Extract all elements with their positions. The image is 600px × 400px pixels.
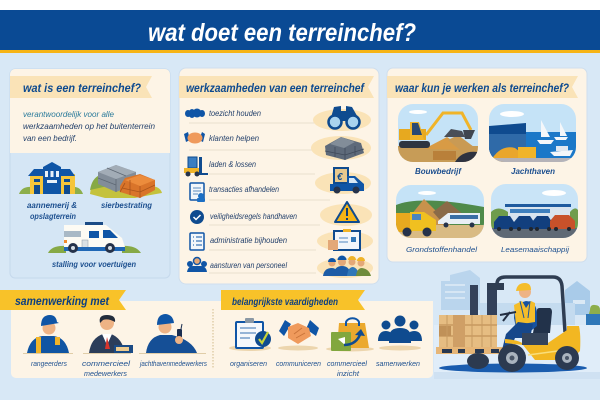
- label: commercieel inzicht: inzicht: [337, 369, 360, 378]
- skill: samenwerken: [378, 316, 422, 350]
- description text: werkzaamheden op het buitenterrein: [23, 122, 156, 131]
- ribbon: belangrijkste vaardigheden: belangrijkste vaardigheden: [232, 296, 338, 308]
- panel: bottom strip: [0, 290, 433, 378]
- task: administratie bijhouden: [190, 233, 288, 250]
- ribbon: belangrijkste vaardigheden: [221, 290, 365, 310]
- seat: [533, 308, 552, 333]
- person: jachthavenmedewerker: [139, 314, 206, 354]
- label: jachthavenmedewerkers: jachthavenmedewerkers: [139, 359, 207, 368]
- background scene: [434, 270, 600, 379]
- ribbon: samenwerking met: samenwerking met: [15, 296, 110, 308]
- label: organiseren: organiseren: [230, 359, 267, 368]
- task: aansturen van personeel: aansturen van personeel: [210, 261, 287, 270]
- task: klanten helpen: klanten helpen: [209, 134, 260, 143]
- heading ribbon: [10, 76, 152, 98]
- person: rangeerders: [23, 315, 73, 354]
- task: aansturen van personeel: [187, 258, 287, 272]
- description text: verantwoordelijk voor alle: [23, 110, 115, 119]
- icon: binoculars: [313, 106, 371, 131]
- scene: marina: [489, 104, 576, 163]
- skill: commercieel inzicht: [326, 318, 374, 352]
- cargo pallet: [436, 315, 504, 354]
- wheels: [467, 353, 489, 369]
- task: transacties afhandelen: transacties afhandelen: [209, 185, 279, 194]
- task: administratie bijhouden: administratie bijhouden: [210, 236, 288, 245]
- task: veiligheidsregels handhaven: veiligheidsregels handhaven: [210, 212, 297, 221]
- forklift illustration: [436, 277, 587, 372]
- skill: communiceren: [278, 320, 319, 350]
- label: commerciele medewerkers: commercieel: [82, 359, 130, 368]
- panel: wat is een terreinchef: [10, 69, 170, 278]
- ribbon: samenwerking met: [0, 290, 126, 310]
- label: Jachthaven: Jachthaven: [511, 167, 555, 176]
- label: stalling voor voertuigen: stalling voor voertuigen: [52, 260, 136, 269]
- driver: [500, 283, 537, 350]
- icon: camper: [48, 222, 141, 253]
- label: commercieel inzicht: commercieel: [327, 359, 367, 368]
- header banner: [0, 10, 600, 53]
- icon: delivery truck: [315, 168, 371, 194]
- description text: van een bedrijf.: [23, 134, 77, 143]
- icon: building: [19, 162, 83, 194]
- task: veiligheidsregels handhaven: [190, 210, 297, 224]
- label: aannemerij & opslagterrein: [27, 201, 77, 221]
- label: Grondstoffenhandel: Grondstoffenhandel: [406, 245, 477, 254]
- label: Bouwbedrijf: Bouwbedrijf: [415, 167, 462, 176]
- description text: [23, 110, 156, 143]
- title: wat doet een terreinchef?: [148, 19, 416, 47]
- heading ribbon: wat is een terreinchef?: [23, 83, 141, 95]
- label: Leasemaaischappij: Leasemaaischappij: [501, 245, 569, 254]
- overhead guard: [497, 277, 565, 332]
- icon: warning triangle: [320, 202, 372, 226]
- task: laden & lossen: laden & lossen: [209, 160, 256, 169]
- task: toezicht houden: toezicht houden: [209, 109, 261, 118]
- label: sierbestrating: sierbestrating: [101, 201, 152, 210]
- label: commerciele medewerkers: medewerkers: [84, 369, 127, 378]
- icon: crew: [317, 256, 373, 278]
- task: toezicht houden: [185, 108, 261, 118]
- scene: leasing company: [491, 184, 578, 238]
- task: laden & lossen: [184, 157, 256, 176]
- icon: delivery truck: €: [337, 172, 343, 183]
- person: commercieel medewerker: [83, 315, 133, 354]
- task: klanten helpen: [184, 132, 260, 144]
- heading ribbon: werkzaamheden van een terreinchef: [186, 83, 365, 95]
- label: communiceren: communiceren: [276, 359, 321, 368]
- body: [505, 326, 580, 360]
- panel: werkzaamheden van een terreinchef: [179, 68, 379, 284]
- label: commerciele medewerkers: [82, 359, 130, 378]
- heading ribbon: waar kun je werken als terreinchef?: [395, 83, 569, 95]
- heading ribbon: [387, 76, 578, 98]
- scene: construction excavator: [398, 104, 478, 162]
- label: aannemerij & opslagterrein: opslagterrein: [30, 212, 76, 221]
- skill: organiseren: [229, 318, 271, 351]
- icon: paving stones and bricks: [90, 165, 162, 198]
- mast: [470, 284, 497, 346]
- scene: raw materials trader: [396, 185, 484, 238]
- label: rangeerders: rangeerders: [31, 359, 67, 368]
- label: samenwerken: samenwerken: [376, 359, 420, 368]
- label: commercieel inzicht: [327, 359, 367, 378]
- icon: stone pile: [311, 136, 371, 160]
- task: transacties afhandelen: [190, 183, 279, 202]
- panel: waar kun je werken: [387, 68, 587, 262]
- label: aannemerij & opslagterrein: aannemerij &: [27, 201, 77, 210]
- heading ribbon: [179, 76, 374, 98]
- icon: clipboard with hand: [317, 229, 373, 251]
